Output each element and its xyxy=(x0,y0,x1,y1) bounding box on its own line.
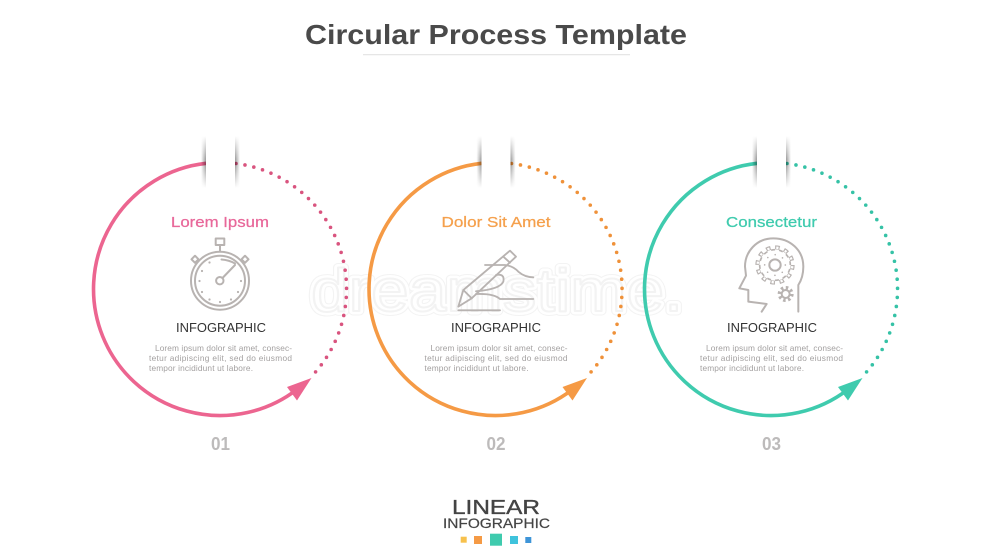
title underline xyxy=(363,54,630,55)
watermark: dreamstime. xyxy=(311,257,683,324)
description xyxy=(424,343,568,373)
description: Lorem ipsum dolor sit amet, consec- xyxy=(155,343,292,353)
label: INFOGRAPHIC xyxy=(727,320,817,335)
description: Lorem ipsum dolor sit amet, consec- xyxy=(430,343,568,353)
description: tempor incididunt ut labore. xyxy=(424,363,528,373)
description: tetur adipiscing elit, sed do eiusmod xyxy=(700,353,843,363)
icon: stopwatch xyxy=(191,238,249,310)
watermark: dreamstime. xyxy=(311,257,683,324)
solid arc with arrow xyxy=(94,163,312,416)
logo word: linear: LINEAR xyxy=(452,497,540,519)
top gap with shadows xyxy=(752,138,790,186)
panel: step 2 xyxy=(369,136,622,454)
label: INFOGRAPHIC xyxy=(451,320,541,335)
icon: hand writing with pen xyxy=(458,251,533,310)
description: tempor incididunt ut labore. xyxy=(149,363,253,373)
title: Circular Process Template xyxy=(305,19,687,50)
solid arc with arrow xyxy=(645,163,862,416)
description: tetur adipiscing elit, sed do eiusmod xyxy=(424,353,568,363)
heading: Lorem Ipsum xyxy=(171,214,269,231)
number: 03 xyxy=(762,434,781,454)
dotted arc xyxy=(236,164,347,375)
dotted arc xyxy=(787,164,898,375)
top gap with shadows xyxy=(202,138,240,186)
heading: Dolor Sit Amet xyxy=(442,214,551,231)
solid arc with arrow xyxy=(369,163,587,416)
watermark: dreamstime. xyxy=(311,257,683,324)
number: 02 xyxy=(486,434,506,454)
footer logo xyxy=(443,497,550,546)
dotted arc xyxy=(512,164,622,375)
description: tempor incididunt ut labore. xyxy=(700,363,804,373)
panel: step 1 xyxy=(94,136,347,454)
number: 01 xyxy=(211,434,230,454)
heading: Consectetur xyxy=(726,214,817,231)
top gap with shadows xyxy=(477,138,515,186)
description xyxy=(700,343,843,373)
label: INFOGRAPHIC xyxy=(176,320,266,335)
icon: head with gears xyxy=(739,238,803,312)
logo word: infographic: INFOGRAPHIC xyxy=(443,515,550,531)
panel: step 3 xyxy=(645,136,898,454)
description xyxy=(149,343,292,373)
description: Lorem ipsum dolor sit amet, consec- xyxy=(706,343,843,353)
logo squares xyxy=(461,534,531,546)
description: tetur adipiscing elit, sed do eiusmod xyxy=(149,353,292,363)
